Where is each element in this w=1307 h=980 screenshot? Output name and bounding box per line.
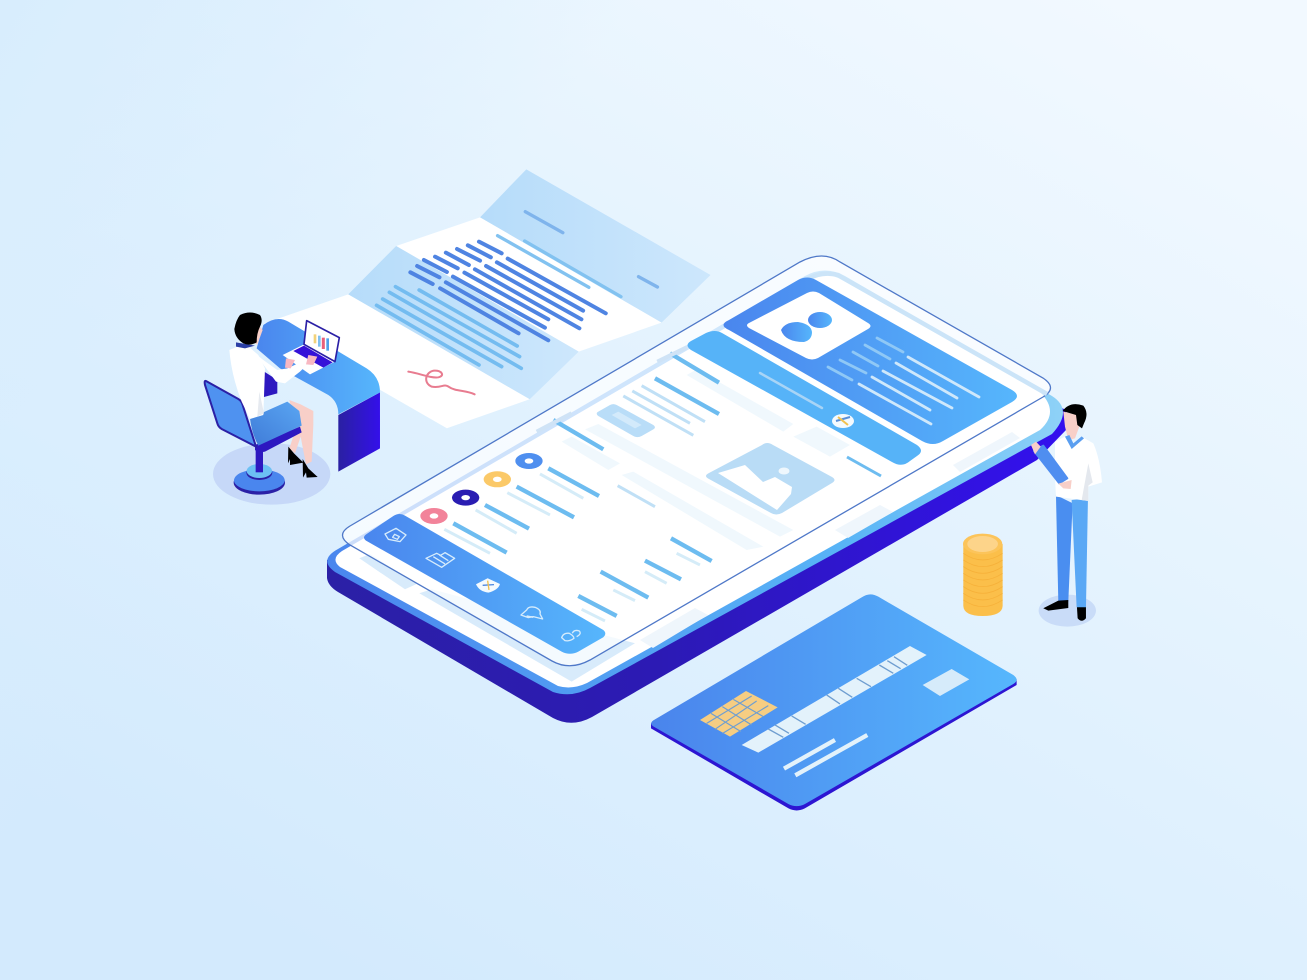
- hands: [285, 355, 317, 368]
- chair strap: [262, 370, 277, 398]
- upper body: [1031, 404, 1102, 501]
- plus button: [832, 414, 854, 428]
- image placeholder: [706, 443, 834, 514]
- woman at desk: [205, 312, 380, 505]
- small button: [597, 404, 655, 437]
- document panels: [264, 169, 711, 428]
- list icons: [420, 453, 543, 524]
- floor shadow: [213, 443, 330, 505]
- face: [253, 326, 263, 344]
- man holding tablet: [1031, 404, 1102, 627]
- desk: [257, 319, 380, 472]
- phone body side: [327, 330, 1066, 723]
- arm: [255, 353, 306, 383]
- hair: [1063, 404, 1087, 428]
- glass layer: [342, 256, 1050, 666]
- phone top edge band: [808, 274, 1047, 394]
- floor shadow: [1039, 595, 1096, 627]
- shield plus icon: [476, 578, 500, 593]
- collar: [1065, 435, 1084, 449]
- shoes: [288, 447, 318, 478]
- pale lines: [444, 474, 700, 621]
- action bar: [688, 331, 921, 465]
- coin stack: [963, 534, 1003, 616]
- credit card: [651, 594, 1017, 810]
- legs: [289, 400, 313, 464]
- phone screen: [335, 275, 1050, 687]
- magnetic strip: [742, 646, 927, 753]
- chair: [234, 427, 302, 495]
- skirt: [250, 402, 302, 446]
- shirt: [1055, 437, 1102, 501]
- profile photo: [747, 292, 870, 360]
- side label line: [847, 457, 881, 476]
- screen content pale sections: [562, 369, 850, 550]
- collar: [236, 342, 255, 348]
- profile icon: [781, 312, 832, 342]
- card face: [651, 594, 1017, 806]
- trousers: [1056, 495, 1088, 608]
- chip: [700, 691, 778, 737]
- T bars: [537, 347, 687, 432]
- top profile card: [724, 278, 1017, 444]
- small rectangle: [923, 669, 969, 696]
- lower body: [1039, 495, 1096, 627]
- shoes: [1043, 600, 1086, 621]
- smartphone: [327, 256, 1066, 723]
- bottom navigation bar: [364, 514, 605, 654]
- tablet: [1034, 446, 1067, 483]
- outer screen bars: [640, 432, 1020, 648]
- card edge: [651, 679, 1017, 810]
- phone rim: [327, 270, 1063, 694]
- strong lines: [453, 353, 719, 616]
- nav icons: [385, 528, 580, 641]
- torso: [229, 343, 265, 419]
- laptop: [283, 321, 339, 374]
- face: [1063, 412, 1079, 440]
- under-glass pale bars: [359, 554, 635, 682]
- document text lines: [377, 212, 657, 368]
- list rows: [420, 347, 719, 621]
- hair: [234, 312, 262, 345]
- signature: [408, 371, 475, 394]
- chair back: [205, 381, 256, 447]
- profile text lines: [828, 338, 979, 424]
- folded document: [264, 169, 711, 428]
- card lines: [784, 735, 867, 775]
- hands: [1031, 442, 1072, 489]
